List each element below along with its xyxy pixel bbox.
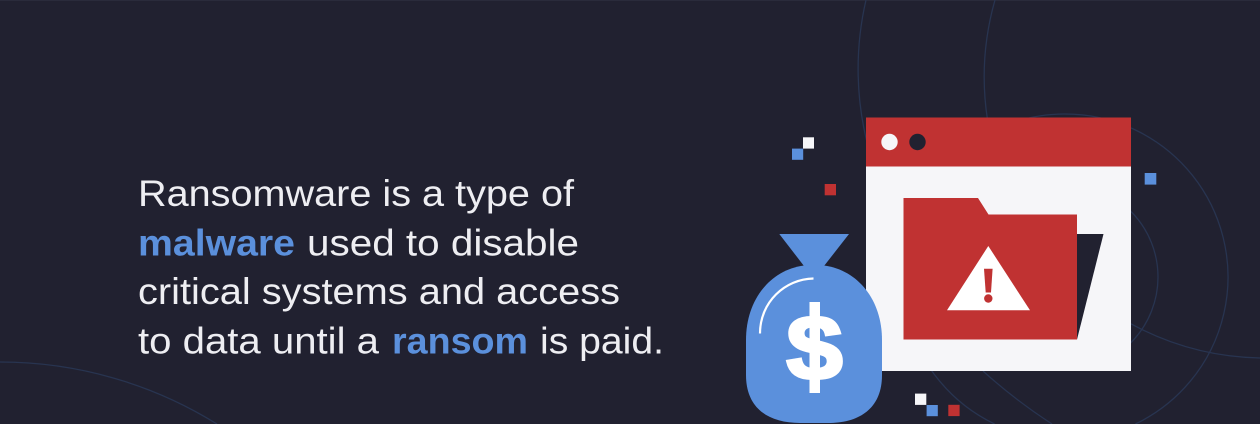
text line 2: highlighted malware: malware: [138, 223, 295, 264]
icon: warning triangle: [947, 246, 1030, 310]
money bag knot: [779, 234, 849, 266]
icon: money bag: [746, 234, 882, 423]
money bag body: [746, 266, 882, 423]
pixel square: right: [1145, 173, 1156, 185]
text line 4: highlighted ransom: ransom: [392, 320, 528, 361]
text block: ransomware definition: [138, 173, 664, 361]
text line 4: end: is paid.: [540, 320, 664, 361]
text line 3: critical systems and access: [138, 271, 620, 312]
window body: [866, 118, 1131, 371]
window title bar: [866, 118, 1131, 166]
window button: dark: [909, 134, 926, 150]
pixel squares: upper left: [792, 137, 836, 195]
folder front: [904, 198, 1077, 340]
money bag highlight: [760, 278, 814, 334]
browser window illustration: [866, 118, 1131, 371]
dollar sign: $: [786, 297, 843, 399]
window button: white: [881, 134, 898, 150]
text line 1: Ransomware is a type of: [138, 173, 575, 214]
folder back flap: [1077, 234, 1104, 340]
pixel squares: bottom: [915, 394, 960, 416]
text line 2: remainder: used to disable: [307, 223, 579, 264]
text line 4: start: to data until a: [138, 320, 379, 361]
